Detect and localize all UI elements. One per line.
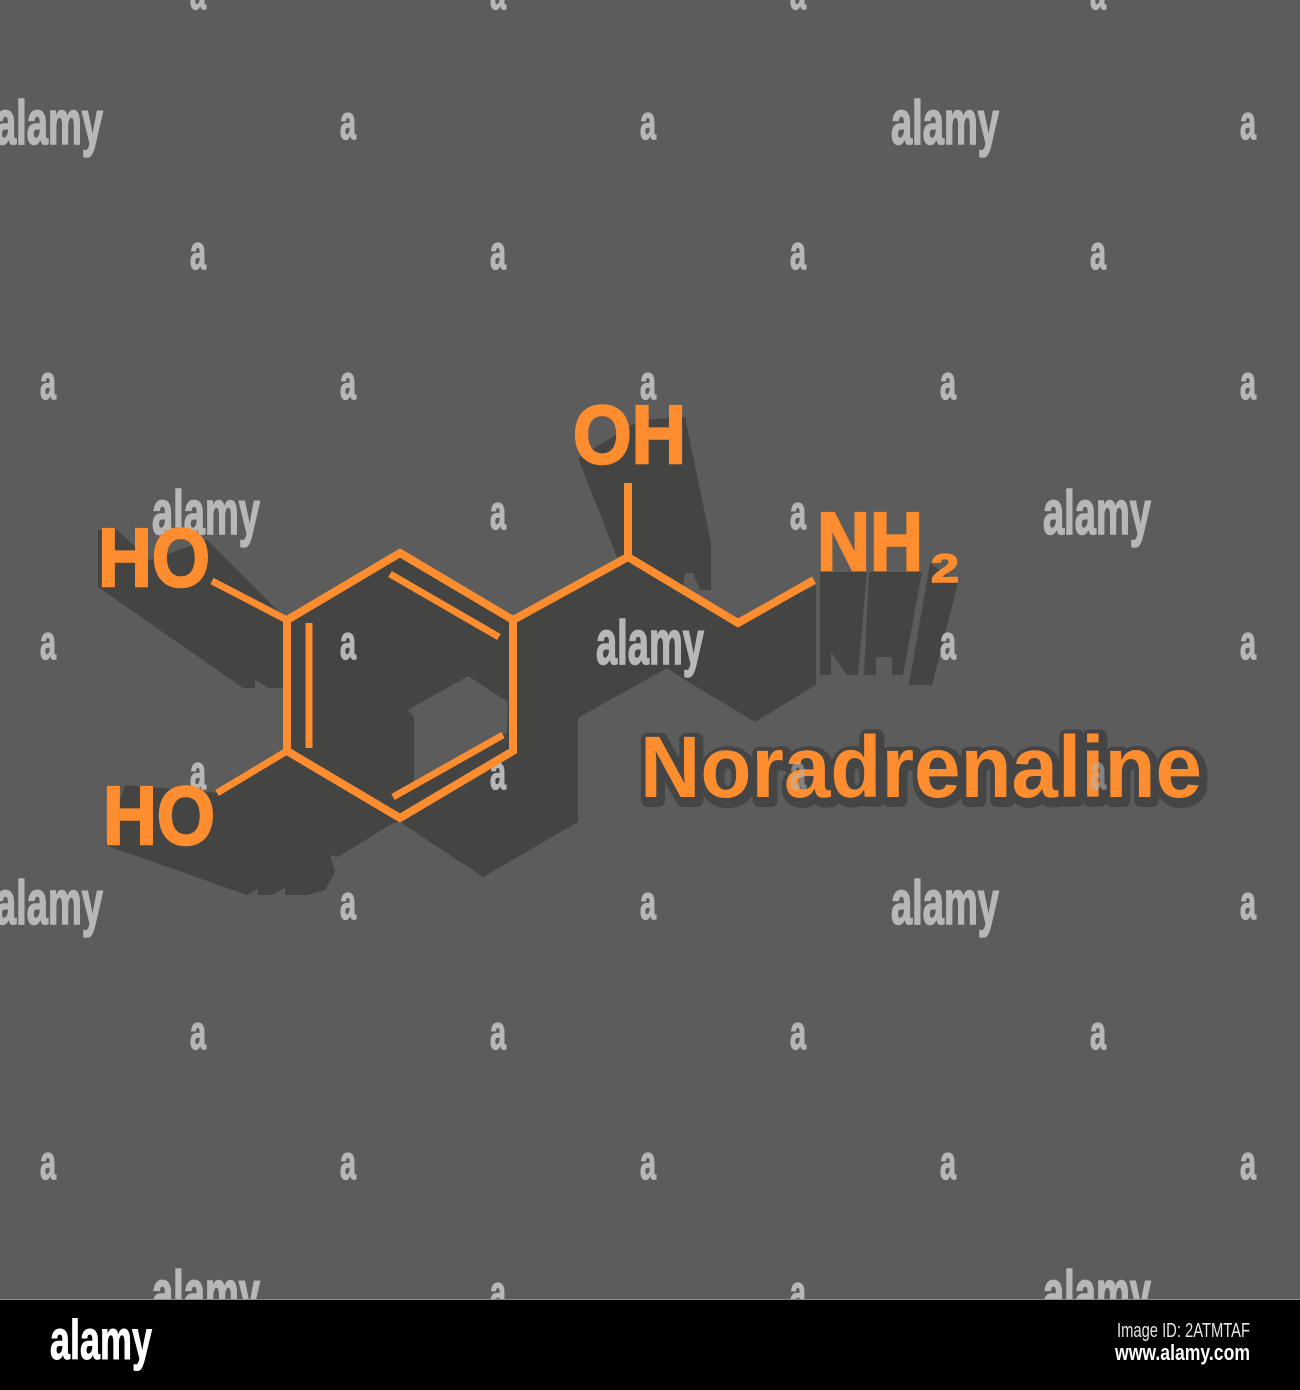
- watermark marks over compound name: [790, 747, 1106, 800]
- ring inner double bond: bottom right: [393, 735, 503, 797]
- watermark pattern: a: [1240, 1137, 1256, 1190]
- watermark pattern: a: [490, 747, 506, 800]
- bond to lower HO: [217, 751, 287, 793]
- image id: Image ID: 2ATMTAF: [1117, 1320, 1250, 1342]
- label: NH2: NH: [817, 495, 923, 588]
- watermark pattern: a: [1240, 97, 1256, 150]
- watermark pattern: a: [490, 1267, 506, 1320]
- compound name: Noradrenaline: [640, 719, 1202, 816]
- shadow: OH group: [578, 417, 711, 590]
- watermark pattern: a: [340, 617, 356, 670]
- watermark pattern: a: [340, 877, 356, 930]
- molecule long shadow: [98, 417, 958, 895]
- watermark pattern: a: [190, 747, 206, 800]
- website: www.alamy.com: [1114, 1340, 1250, 1365]
- watermark pattern: a: [1240, 357, 1256, 410]
- compound name outline shadow: Noradrenaline: [642, 722, 1204, 819]
- watermark pattern: a: [490, 227, 506, 280]
- watermark pattern: a: [490, 1007, 506, 1060]
- shadow: ring and side chain: [105, 552, 816, 895]
- watermark pattern: a: [640, 1137, 656, 1190]
- watermark pattern: a: [340, 357, 356, 410]
- label: NH2: 2: [931, 547, 959, 591]
- watermark pattern: alamy: [152, 479, 260, 548]
- label: upper HO: HO: [98, 511, 210, 604]
- watermark pattern: a: [640, 97, 656, 150]
- watermark pattern: alamy: [891, 89, 999, 158]
- watermark pattern: alamy: [1043, 1259, 1151, 1328]
- shadow: upper HO group: [98, 528, 287, 688]
- shadow: H of NH2: [864, 572, 922, 675]
- label: OH: OH: [573, 388, 686, 481]
- footer logo: alamy: [50, 1308, 152, 1371]
- watermark pattern: a: [490, 487, 506, 540]
- watermark pattern: a: [190, 1007, 206, 1060]
- watermark pattern: a: [790, 487, 806, 540]
- watermark pattern: a: [340, 1137, 356, 1190]
- ring inner double bond: top right: [390, 574, 499, 637]
- watermark pattern: alamy: [152, 1259, 260, 1328]
- shadow: N of NH2: [820, 572, 867, 675]
- watermark pattern: a: [340, 97, 356, 150]
- watermark pattern: a: [40, 617, 56, 670]
- watermark pattern: alamy: [0, 89, 103, 158]
- watermark pattern: a: [40, 1137, 56, 1190]
- bond to upper HO: [212, 581, 287, 620]
- watermark pattern: a: [640, 357, 656, 410]
- molecule skeleton bonds: [212, 483, 814, 818]
- watermark pattern: a: [1240, 877, 1256, 930]
- watermark pattern: a: [790, 1267, 806, 1320]
- watermark marks over compound name: a: [790, 747, 806, 800]
- label: lower HO: HO: [103, 769, 215, 862]
- watermark pattern: a: [940, 1137, 956, 1190]
- watermark pattern: a: [190, 227, 206, 280]
- bond to OH: [624, 483, 632, 557]
- benzene ring: [287, 553, 513, 818]
- watermark pattern: a: [790, 1007, 806, 1060]
- footer bar: [0, 1299, 1300, 1390]
- shadow: subscript 2: [909, 563, 958, 685]
- watermark pattern: alamy: [0, 869, 103, 938]
- watermark pattern: a: [40, 357, 56, 410]
- side chain: [513, 557, 814, 623]
- watermark pattern: a: [1240, 617, 1256, 670]
- watermark marks over compound name: a: [1090, 747, 1106, 800]
- watermark pattern: a: [940, 617, 956, 670]
- watermark pattern: a: [940, 357, 956, 410]
- watermark pattern: a: [640, 877, 656, 930]
- watermark pattern: alamy: [1043, 479, 1151, 548]
- watermark pattern: alamy: [596, 609, 704, 678]
- watermark pattern: a: [1090, 1007, 1106, 1060]
- watermark pattern: alamy: [891, 869, 999, 938]
- ring inner double bond: left: [306, 623, 312, 748]
- watermark pattern: a: [1090, 227, 1106, 280]
- watermark pattern: a: [790, 227, 806, 280]
